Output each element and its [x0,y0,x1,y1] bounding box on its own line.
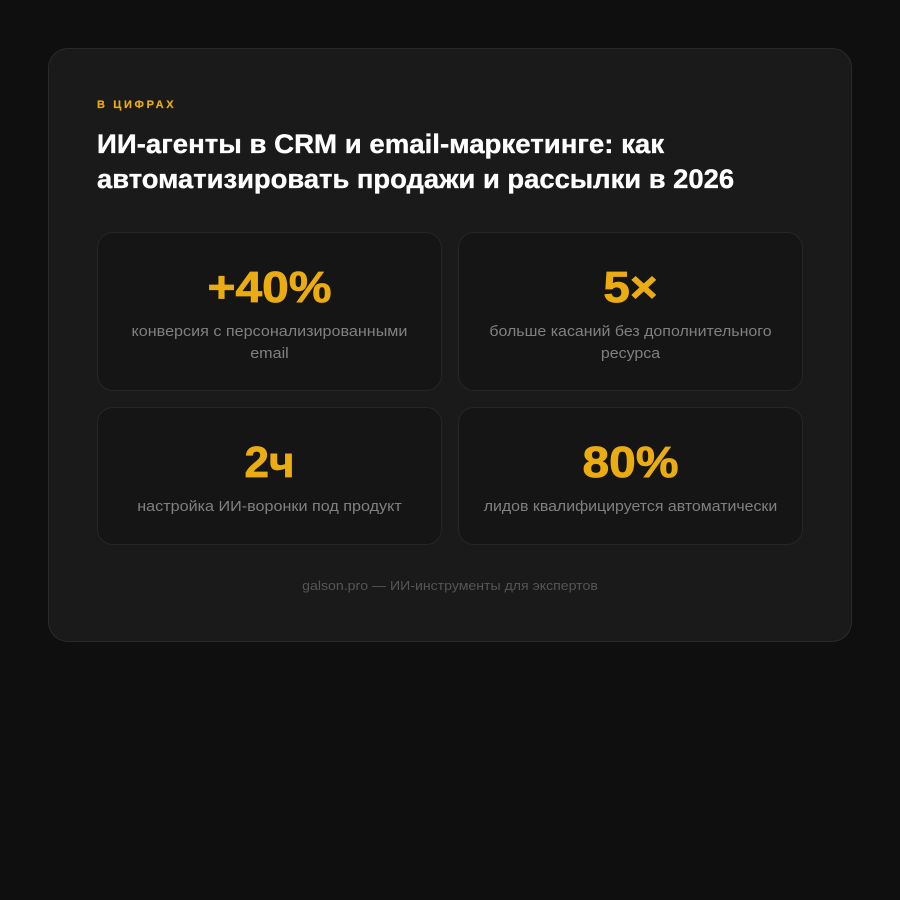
stat description: лидов квалифицируется автоматически [484,498,777,515]
stat description [489,323,772,362]
title: ИИ-агенты в CRM и email-маркетинге: как [97,129,664,159]
stat card: +40% [97,232,442,391]
stat description: настройка ИИ-воронки под продукт [137,498,402,515]
panel: main card [48,48,852,642]
stat value: 80% [582,438,678,487]
stat card: 5x [458,232,803,391]
footer: galson.pro — ИИ-инструменты для экспертов [302,578,598,593]
stat card: 80% [458,407,803,545]
stat value: 5× [603,263,658,312]
title: автоматизировать продажи и рассылки в 2026 [97,164,734,194]
stat card: 2h [97,407,442,545]
stat value: +40% [207,263,331,312]
stat description: больше касаний без дополнительного [489,323,772,340]
stat description [132,323,407,362]
stat description: конверсия с персонализированными [132,323,407,340]
title [97,129,734,194]
stat description: ресурса [601,345,660,362]
eyebrow label: В ЦИФРАХ [97,99,176,111]
stat value: 2ч [244,438,294,487]
stat description: email [250,345,289,362]
